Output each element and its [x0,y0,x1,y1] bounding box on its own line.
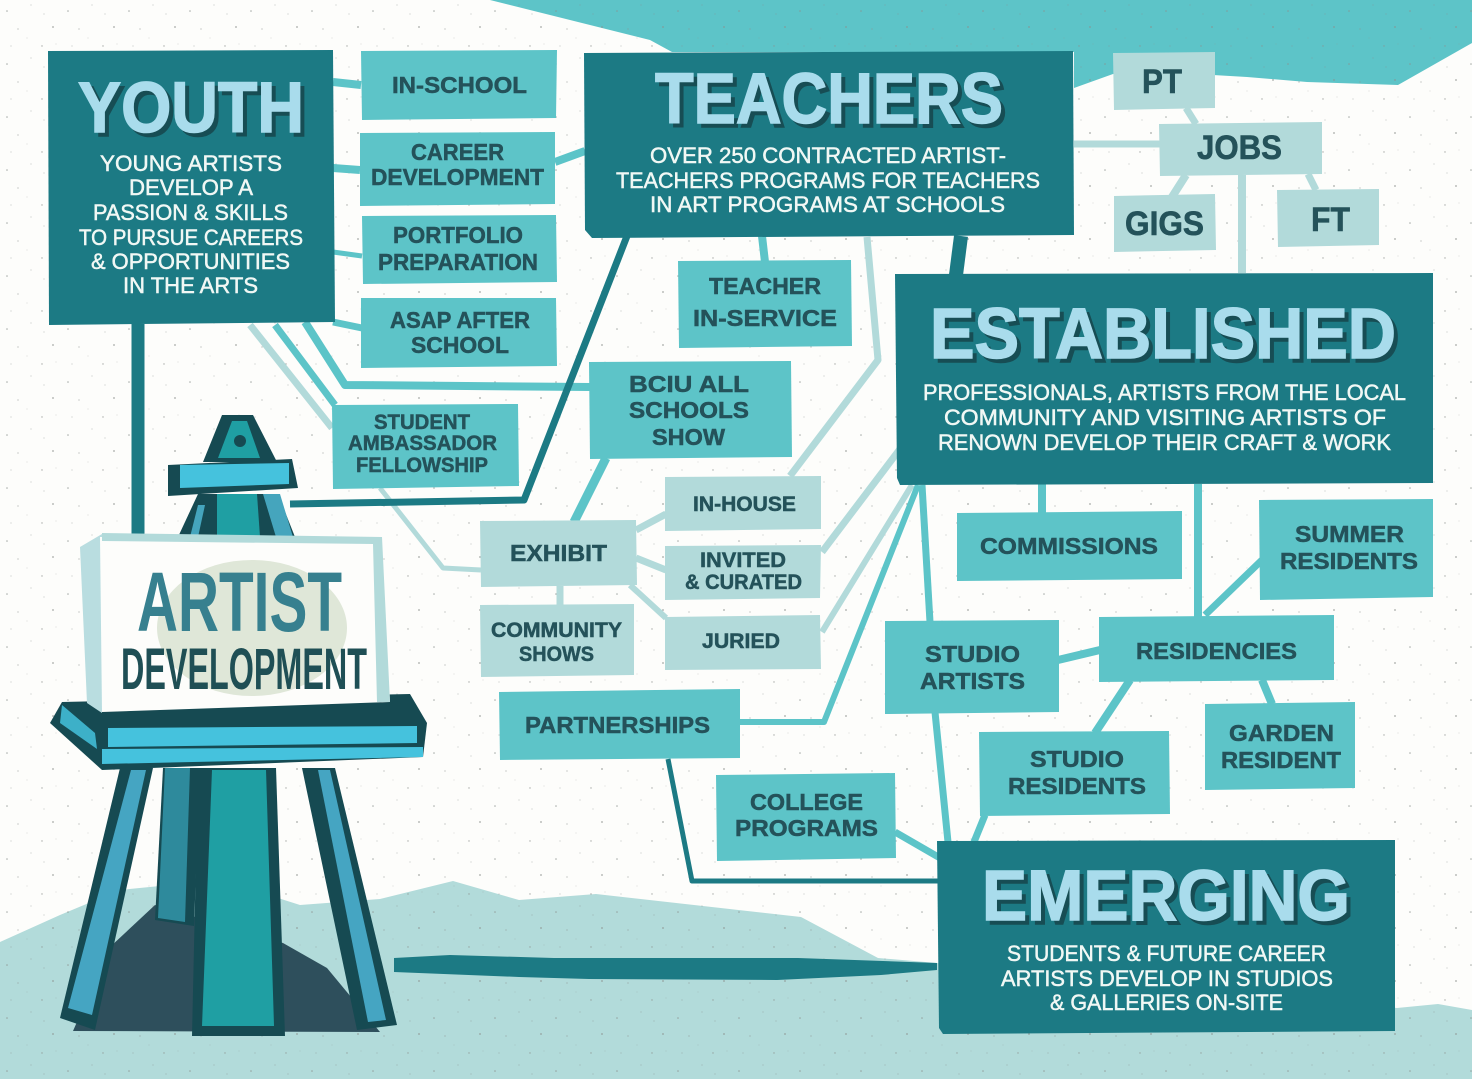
established description: COMMUNITY AND VISITING ARTISTS OF [944,405,1386,430]
box: garden resident: RESIDENT [1221,747,1341,773]
box: studio artists [885,620,1059,714]
easel left leg [60,768,153,1030]
easel tray [50,694,427,770]
youth description [79,151,303,298]
box: bciu all schools show: SHOW [652,424,725,450]
box: career development [360,132,555,206]
heading: emerging: EMERGING [982,857,1350,936]
box: portfolio preparation [362,215,557,284]
emerging description [1001,941,1333,1015]
box: studio artists: STUDIO [925,641,1020,667]
box: juried: JURIED [702,630,780,653]
box: community shows [480,604,634,677]
canvas top and right edge [102,533,390,702]
box: college programs: PROGRAMS [735,815,878,841]
box: juried [665,615,821,670]
box: partnerships: PARTNERSHIPS [525,712,710,738]
teachers description: IN ART PROGRAMS AT SCHOOLS [650,192,1005,217]
established description: RENOWN DEVELOP THEIR CRAFT & WORK [938,430,1391,455]
box: asap after school [361,298,557,368]
box: community shows: SHOWS [519,643,594,666]
box: asap after school: ASAP AFTER [390,307,530,333]
box: exhibit [480,520,637,587]
panel: teachers [584,51,1074,238]
panel: youth [48,50,335,325]
heading: teachers: TEACHERS [655,60,1003,139]
box: career development: CAREER [411,139,504,165]
box: college programs: COLLEGE [750,789,863,815]
easel upper crossbar [168,459,298,496]
box: student ambassador fellowship: AMBASSADOR [348,432,497,455]
ground hills [0,870,1472,1079]
teachers description: OVER 250 CONTRACTED ARTIST- [650,143,1006,168]
box: in-house: IN-HOUSE [693,493,796,516]
box: garden resident: GARDEN [1229,720,1334,746]
emerging description: & GALLERIES ON-SITE [1050,990,1283,1015]
emerging description: STUDENTS & FUTURE CAREER [1007,941,1326,966]
youth description: TO PURSUE CAREERS [79,225,303,250]
box: community shows: COMMUNITY [491,619,622,642]
box: pt: PT [1142,63,1182,101]
canvas title: DEVELOPMENT [121,637,367,702]
easel illustration [50,415,427,1036]
easel centre leg [192,768,285,1036]
youth description: DEVELOP A [129,175,253,200]
box: in-school: IN-SCHOOL [392,72,527,98]
easel top peak [203,415,277,462]
box: summer residents: RESIDENTS [1280,548,1418,574]
youth description: IN THE ARTS [123,273,258,298]
box: invited and curated [665,545,821,600]
youth description: YOUNG ARTISTS [100,151,282,176]
sky shape at top [490,0,1472,88]
box: residencies: RESIDENCIES [1136,638,1297,664]
box: jobs: JOBS [1197,129,1282,167]
box: invited and curated: INVITED [700,549,786,572]
box: jobs [1159,122,1322,176]
box: portfolio preparation: PREPARATION [378,249,538,275]
box: teacher in-service: IN-SERVICE [693,305,837,331]
box: in-house [665,476,821,531]
box: commissions: COMMISSIONS [980,533,1158,559]
box: bciu all schools show [589,361,792,459]
easel back leg face [158,768,190,922]
teachers description [616,143,1040,217]
established description: PROFESSIONALS, ARTISTS FROM THE LOCAL [923,380,1406,405]
canvas title: ARTIST [137,555,342,649]
box: student ambassador fellowship: STUDENT [374,411,470,434]
box: partnerships [499,689,740,760]
box: ft [1277,189,1379,247]
box: studio residents: RESIDENTS [1008,773,1146,799]
box: invited and curated: & CURATED [685,571,802,594]
box: studio residents: STUDIO [1030,746,1124,772]
emerging description: ARTISTS DEVELOP IN STUDIOS [1001,966,1333,991]
box: bciu all schools show: BCIU ALL [629,371,749,397]
box: student ambassador fellowship: FELLOWSHIP [356,454,488,477]
box: teacher in-service: TEACHER [709,273,821,299]
box: in-school [361,50,557,120]
box: teacher in-service [678,260,852,348]
canvas oval accent [157,560,347,696]
teachers description: TEACHERS PROGRAMS FOR TEACHERS [616,168,1040,193]
box: career development: DEVELOPMENT [371,164,544,190]
easel shadow [73,905,380,1032]
youth description: PASSION & SKILLS [93,200,288,225]
canvas side edge [80,534,102,713]
box: asap after school: SCHOOL [411,332,509,358]
box: ft: FT [1311,201,1350,239]
box: studio artists: ARTISTS [920,668,1025,694]
canvas board [100,537,390,712]
box: residencies [1099,615,1334,682]
panel: emerging [937,840,1395,1034]
easel back centre leg [155,768,200,926]
connector lines [138,82,1316,980]
box: college programs [716,773,896,861]
heading: established: ESTABLISHED [930,295,1396,374]
canvas title [121,555,367,702]
box: commissions [957,511,1182,581]
box: bciu all schools show: SCHOOLS [629,397,749,423]
box: student ambassador fellowship [332,404,519,489]
box: summer residents [1259,499,1433,600]
box: pt [1113,52,1215,110]
box: studio residents [979,731,1170,816]
box: gigs: GIGS [1125,205,1204,243]
easel right leg [302,768,397,1030]
established description [923,380,1406,455]
box: garden resident [1205,702,1355,790]
box: exhibit: EXHIBIT [510,540,607,566]
panel: established [895,273,1433,485]
youth description: & OPPORTUNITIES [91,249,290,274]
box: portfolio preparation: PORTFOLIO [393,222,523,248]
box: summer residents: SUMMER [1295,521,1404,547]
box: gigs [1114,194,1216,252]
heading: youth: YOUTH [78,69,304,148]
easel upper legs [178,494,295,537]
